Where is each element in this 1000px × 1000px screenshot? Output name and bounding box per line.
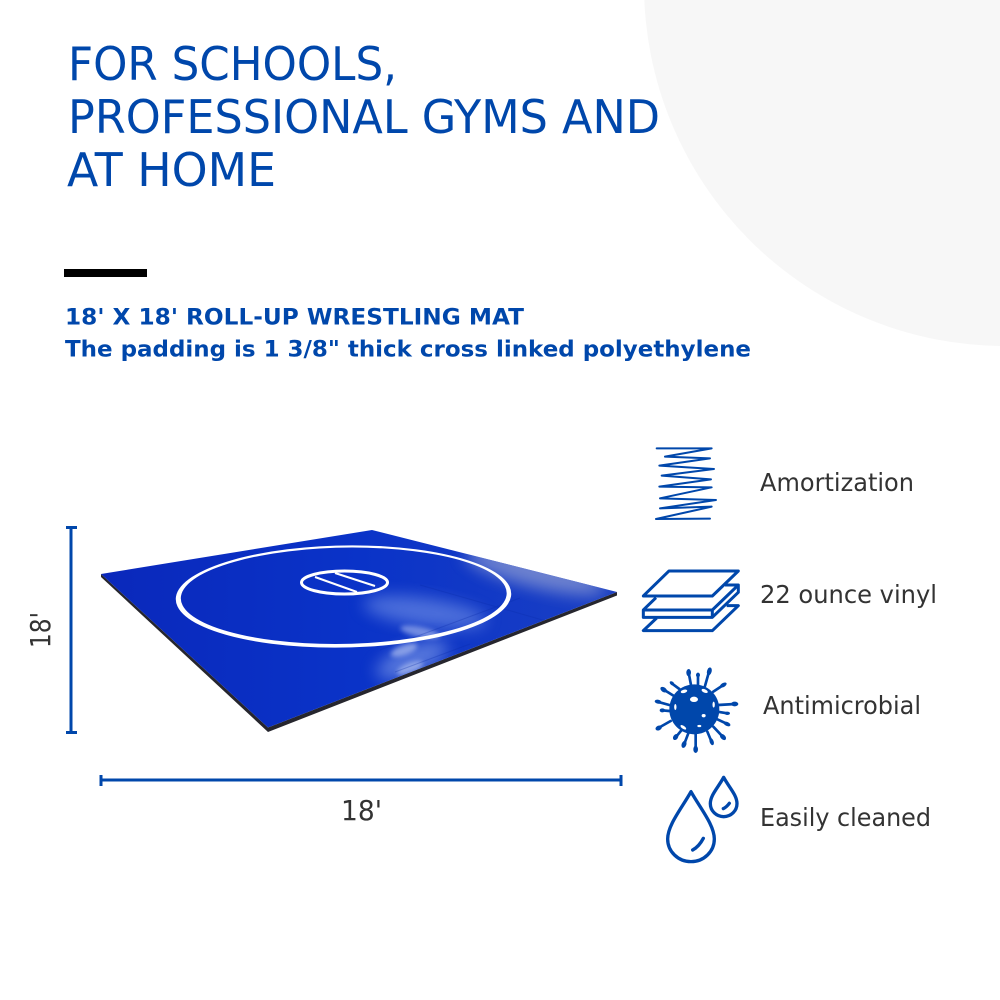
large wrestling circle: [176, 545, 511, 648]
label: antimicrobial: Antimicrobial: [763, 691, 921, 720]
height label: 18': [24, 612, 57, 648]
label: easily cleaned: Easily cleaned: [760, 803, 931, 832]
width dimension line: [101, 775, 621, 786]
icon: water drops: [668, 777, 737, 862]
black accent bar: [64, 269, 147, 277]
icon: vinyl layers: [643, 571, 738, 631]
width label: 18': [341, 794, 382, 827]
title: FOR SCHOOLS,: [68, 37, 397, 91]
height dimension line: [66, 527, 77, 733]
subheading: [65, 306, 751, 362]
icon: microbe: [654, 667, 738, 753]
subheading: 18' X 18' ROLL-UP WRESTLING MAT: [65, 306, 524, 330]
background corner circle: [644, 0, 1000, 346]
centre circle: [302, 571, 388, 594]
label: amortization: Amortization: [760, 468, 914, 497]
label: vinyl: 22 ounce vinyl: [760, 580, 937, 609]
title: [67, 37, 660, 197]
title: PROFESSIONAL GYMS AND: [68, 90, 660, 144]
icon: spring: [656, 448, 716, 519]
title: AT HOME: [67, 143, 276, 197]
subheading: The padding is 1 3/8" thick cross linked polyethylene: [65, 338, 751, 362]
wrestling mat: [101, 530, 617, 732]
starting lines: [315, 573, 375, 592]
